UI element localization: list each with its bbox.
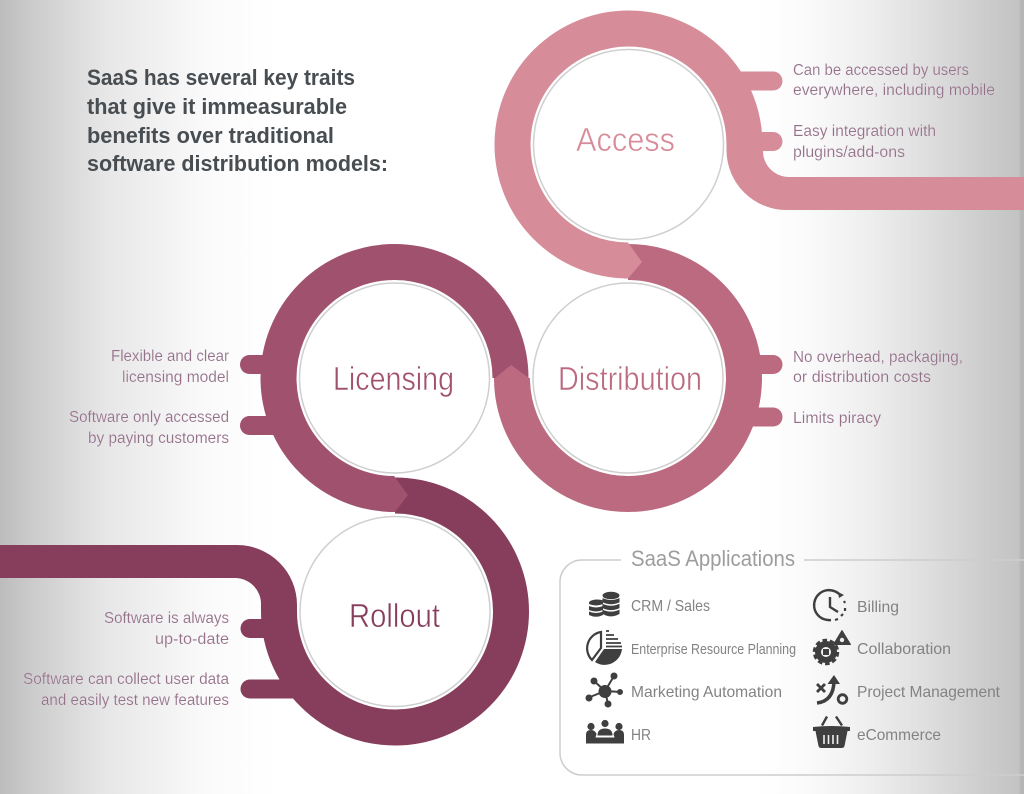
item: CRM / Sales [589, 592, 710, 617]
text: HR: HR [631, 727, 651, 744]
label: distribution: Distribution [558, 360, 702, 397]
heading: software distribution models: [87, 151, 388, 176]
panel title: SaaS Applications [631, 546, 795, 571]
text: rollout points [23, 610, 229, 709]
text: Marketing Automation: Marketing Automation [631, 684, 782, 701]
text: rollout points: up-to-date [155, 631, 229, 648]
icon: gears [814, 630, 850, 664]
text: Enterprise Resource Planning: Enterprise Resource Planning [631, 641, 796, 658]
text: rollout points: Software is always [104, 610, 229, 627]
icon: shopping basket [813, 716, 850, 748]
text: CRM / Sales: CRM / Sales [631, 598, 710, 615]
heading: SaaS has several key traits [87, 65, 355, 90]
label: access: Access [576, 121, 675, 158]
circle: rollout [300, 516, 490, 706]
ring: rollout [279, 496, 511, 728]
ring: distribution [512, 262, 744, 494]
text: rollout points: and easily test new features [41, 692, 229, 709]
item: Billing [814, 590, 899, 620]
text: licensing points: licensing model [122, 369, 229, 386]
panel frame [560, 560, 1024, 775]
item: Marketing Automation [586, 674, 782, 706]
tail band: rollout [0, 545, 297, 612]
text: distribution points: Limits piracy [793, 410, 881, 427]
arrow: licensing to rollout [390, 476, 408, 512]
connector stubs: access [735, 81, 773, 142]
icon: database stacks [589, 592, 620, 617]
item: HR [586, 720, 651, 744]
icon: clock [814, 590, 845, 620]
icon: pie chart [587, 631, 622, 665]
circle: licensing [300, 283, 490, 473]
icon: network nodes [586, 674, 622, 706]
panel: licensing [69, 262, 510, 512]
text: distribution points: or distribution costs [793, 369, 931, 386]
text: access points [793, 62, 995, 161]
item: eCommerce [813, 716, 941, 748]
text: access points: plugins/add-ons [793, 144, 905, 161]
arrow: distribution to licensing [495, 365, 529, 382]
item: Collaboration [814, 630, 951, 664]
text: licensing points: by paying customers [88, 430, 229, 447]
circle: access [534, 50, 724, 240]
text: distribution points: No overhead, packaging, [793, 349, 963, 366]
text: access points: Easy integration with [793, 123, 936, 140]
ring: access [512, 29, 744, 261]
tail band: access [726, 144, 1024, 210]
connector stubs: distribution [740, 364, 773, 417]
text: Project Management: Project Management [857, 684, 1001, 701]
text: eCommerce: eCommerce [857, 727, 941, 744]
connector stubs: rollout [250, 628, 305, 689]
text: licensing points: Software only accessed [69, 409, 229, 426]
text: access points: Can be accessed by users [793, 62, 969, 79]
label: rollout: Rollout [349, 597, 440, 634]
panel: rollout [0, 496, 511, 728]
text: licensing points [69, 348, 230, 447]
text: Billing: Billing [857, 599, 899, 616]
text: access points: everywhere, including mobile [793, 82, 995, 99]
connector stubs: licensing [250, 364, 290, 426]
label: licensing: Licensing [333, 360, 454, 397]
icon: play diagram [817, 675, 847, 703]
arrow: access to distribution [624, 242, 642, 278]
item: Project Management [817, 675, 1001, 703]
item: Enterprise Resource Planning [587, 631, 796, 665]
ring: licensing [279, 262, 510, 494]
heading: that give it immeasurable [87, 94, 347, 119]
circle: distribution [533, 283, 723, 473]
icon: people at table [586, 720, 624, 744]
text: distribution points [793, 349, 963, 427]
panel: SaaS applications [560, 546, 1024, 775]
text: licensing points: Flexible and clear [111, 348, 230, 365]
text: Collaboration: Collaboration [857, 641, 951, 658]
heading: benefits over traditional [87, 123, 334, 148]
heading [87, 65, 388, 176]
panel: distribution [495, 262, 963, 494]
text: rollout points: Software can collect user data [23, 671, 229, 688]
panel: access [512, 29, 1024, 279]
